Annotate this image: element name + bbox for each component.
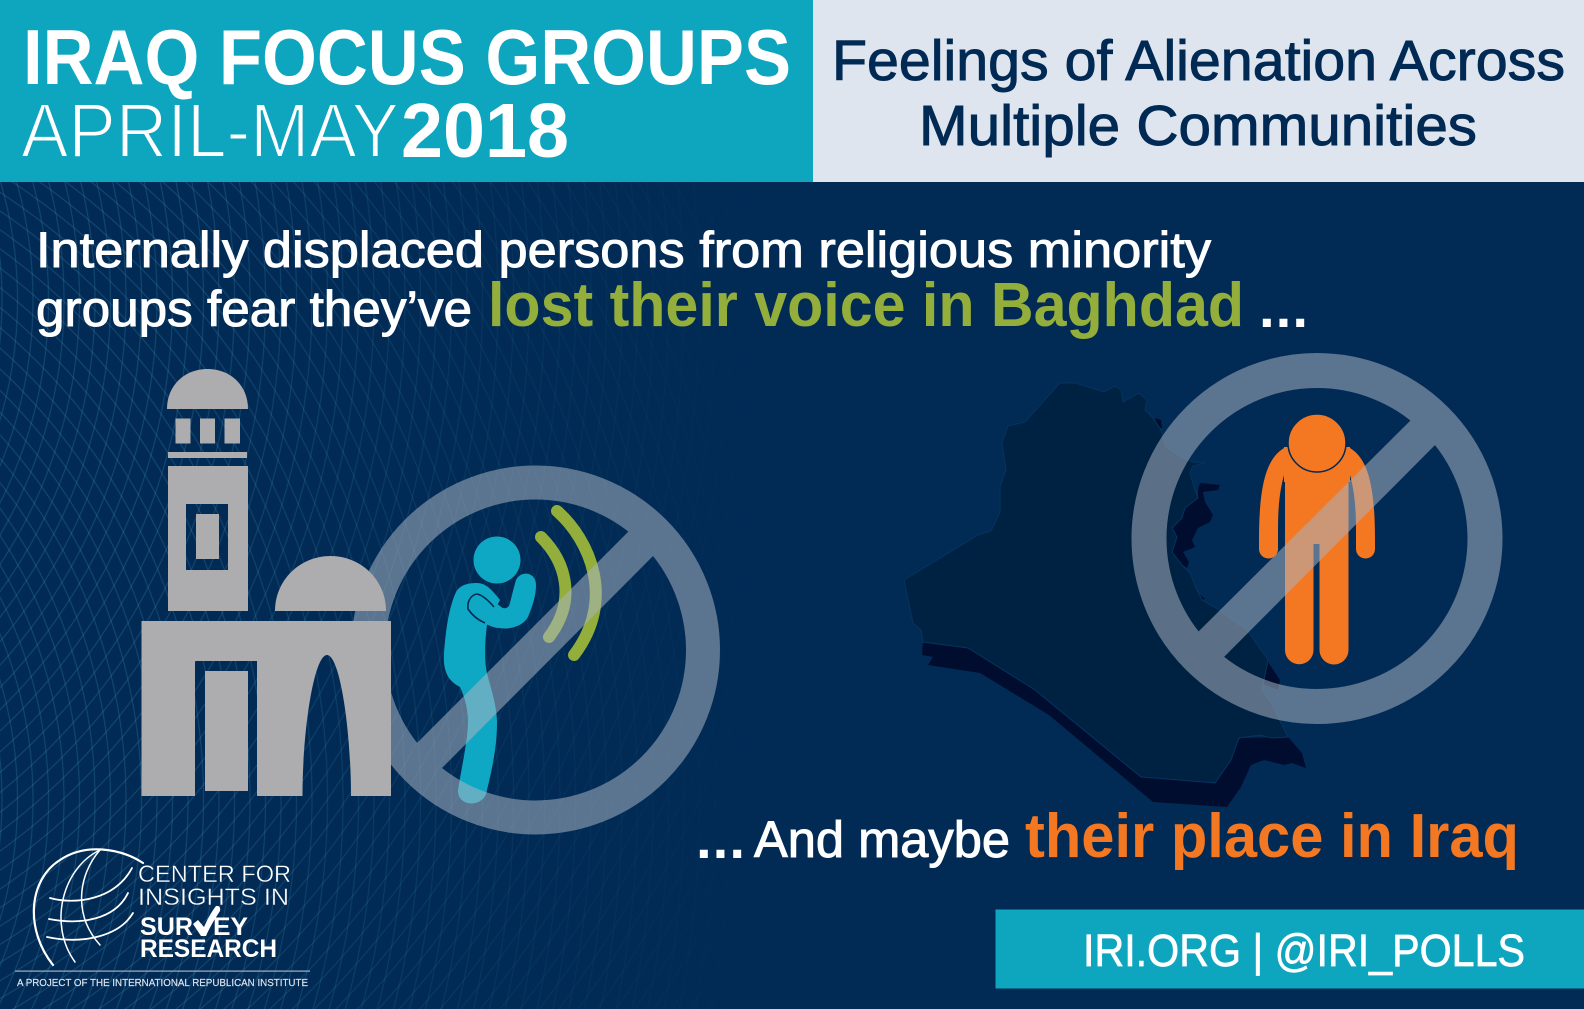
shoulders xyxy=(1284,447,1350,482)
logo text: CENTER FOR xyxy=(138,861,291,888)
subtitle line 2: Multiple Communities xyxy=(919,94,1477,158)
icon: prohibition sign over orange person xyxy=(1149,370,1485,706)
logo: Center for Insights in Survey Research xyxy=(15,849,310,989)
headline line 2 start: groups fear they’ve xyxy=(36,281,472,337)
head xyxy=(1288,414,1346,472)
headline highlight in green: lost their voice in Baghdad xyxy=(488,271,1244,340)
headline text xyxy=(36,222,1306,340)
sound waves xyxy=(541,511,596,655)
date: 2018: 2018 xyxy=(401,88,569,174)
left arm xyxy=(1259,448,1284,558)
door xyxy=(205,671,248,791)
map of Iraq xyxy=(904,383,1306,807)
website and social banner xyxy=(996,910,1584,988)
header panel: title xyxy=(0,0,813,182)
date: April-May: APRIL-MAY xyxy=(21,88,399,174)
main dome xyxy=(275,556,386,611)
logo check mark xyxy=(193,906,220,936)
minaret dome xyxy=(167,369,248,409)
icon: person with head bowed xyxy=(1259,414,1375,664)
icon: mosque xyxy=(142,369,391,796)
person head xyxy=(474,536,520,584)
closing highlight in orange: their place in Iraq xyxy=(1025,802,1519,871)
right arm xyxy=(1350,448,1375,558)
banner text: IRI.ORG | @IRI_POLLS xyxy=(1083,925,1525,976)
logo: Center for Insights in Survey Research: SUR xyxy=(140,913,193,941)
icon: person praying with sound waves xyxy=(444,511,596,804)
closing statement xyxy=(698,802,1519,871)
headline line 1: Internally displaced persons from religious minority xyxy=(36,222,1211,278)
ellipsis: ... xyxy=(1261,288,1306,335)
map shadow: lower edge xyxy=(922,642,1306,807)
title: Iraq Focus Groups: IRAQ FOCUS GROUPS xyxy=(23,13,791,101)
main building xyxy=(142,621,391,796)
logo globe xyxy=(34,849,143,965)
minaret windows xyxy=(176,418,240,444)
person arm xyxy=(465,574,536,629)
map shadow: eastern edge xyxy=(1172,483,1220,568)
logo tagline: A PROJECT OF THE INTERNATIONAL REPUBLICAN INSTITUTE xyxy=(17,978,309,989)
header panel: subtitle xyxy=(813,0,1584,182)
icon: prohibition sign over person xyxy=(368,482,703,818)
map silhouette xyxy=(904,383,1288,783)
logo: Center for Insights in Survey Research: INSIGHTS IN xyxy=(138,884,289,911)
logo: Center for Insights in Survey Research: EY xyxy=(213,913,248,941)
minaret band xyxy=(168,452,247,458)
torso and legs xyxy=(1285,475,1348,664)
closing text: And maybe xyxy=(754,811,1010,868)
minaret tower xyxy=(168,466,248,611)
person body xyxy=(444,583,500,804)
tower window xyxy=(196,514,219,559)
ellipsis: ... xyxy=(698,819,743,866)
logo: Center for Insights in Survey Research: RESEARCH xyxy=(140,935,277,963)
subtitle line 1: Feelings of Alienation Across xyxy=(832,29,1565,93)
